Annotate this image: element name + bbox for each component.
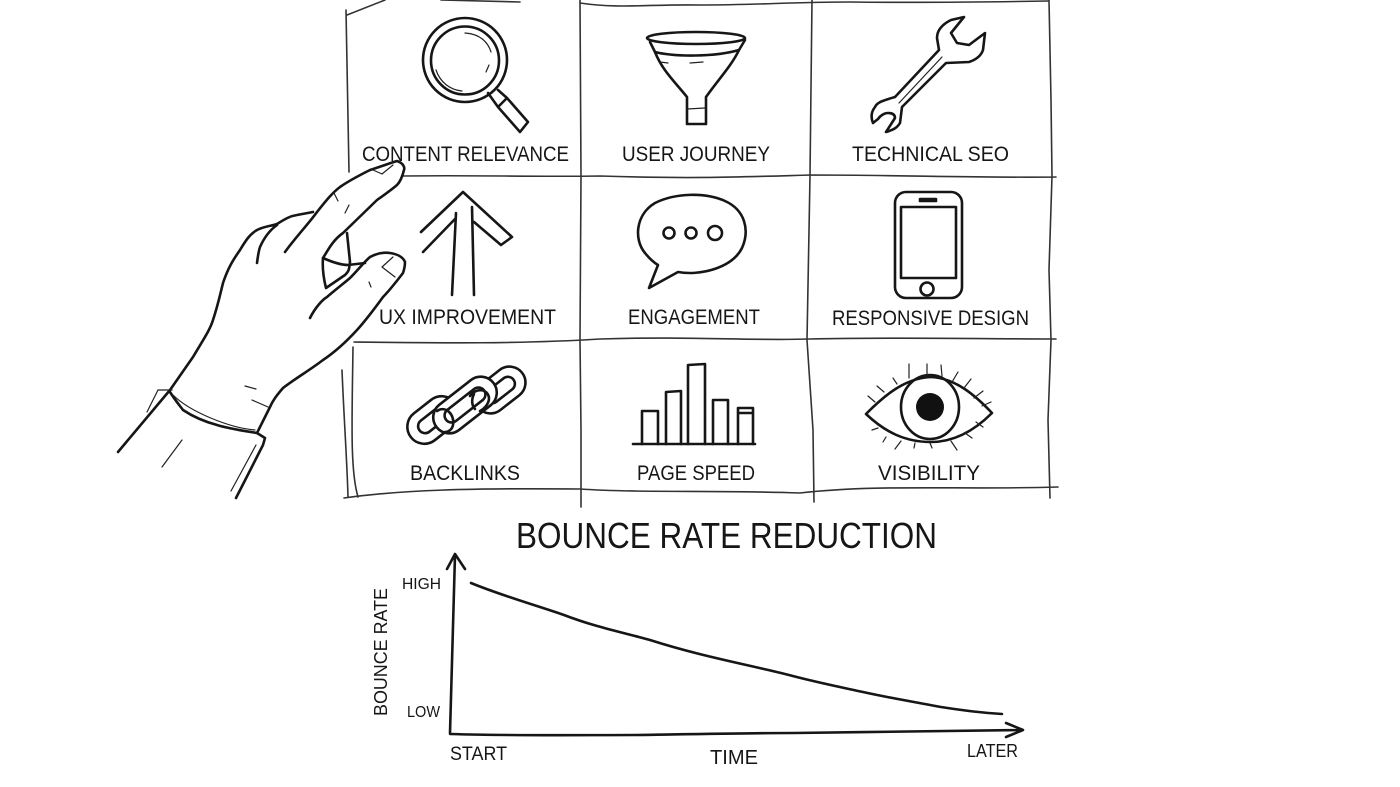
x label: later: LATER [967, 741, 1018, 761]
y axis [447, 554, 465, 733]
cell: ux improvement [379, 192, 556, 329]
label: technical seo: TECHNICAL SEO [852, 143, 1009, 166]
cell: visibility [866, 364, 992, 485]
label: backlinks: BACKLINKS [410, 462, 520, 485]
x label: time: TIME [710, 747, 758, 769]
x label: start: START [450, 744, 507, 765]
title: BOUNCE RATE REDUCTION [516, 515, 937, 556]
icon: up arrow [421, 192, 512, 295]
label: responsive design: RESPONSIVE DESIGN [832, 307, 1029, 330]
icon: speech bubble [638, 195, 746, 288]
y label: low: LOW [407, 704, 441, 721]
cell: content relevance [362, 18, 569, 166]
label: content relevance: CONTENT RELEVANCE [362, 143, 569, 166]
cell: backlinks [400, 360, 532, 485]
label: user journey: USER JOURNEY [622, 143, 770, 166]
icon: magnifying glass [423, 18, 528, 132]
cell: user journey [622, 32, 770, 166]
label: engagement: ENGAGEMENT [628, 306, 760, 329]
y axis title: BOUNCE RATE [371, 588, 391, 716]
cell: technical seo [852, 17, 1009, 166]
label: page speed: PAGE SPEED [637, 462, 755, 485]
icon: pointing hand [118, 161, 405, 498]
y label: high: HIGH [402, 576, 441, 593]
cell: responsive design [832, 192, 1029, 330]
label: visibility: VISIBILITY [878, 462, 980, 485]
icon: chain links [400, 360, 532, 451]
icon: bar chart [633, 364, 755, 444]
bounce rate trend line [471, 583, 1002, 714]
icon: eye [866, 364, 992, 450]
icon: funnel [647, 32, 745, 124]
x axis [450, 723, 1023, 737]
label: ux improvement: UX IMPROVEMENT [379, 306, 556, 329]
line chart: bounce rate over time [371, 554, 1023, 769]
panel: icon grid [342, 0, 1058, 507]
cell: page speed [633, 364, 755, 485]
cell: engagement [628, 195, 760, 329]
icon: smartphone [895, 192, 962, 298]
icon: wrench [872, 17, 985, 132]
